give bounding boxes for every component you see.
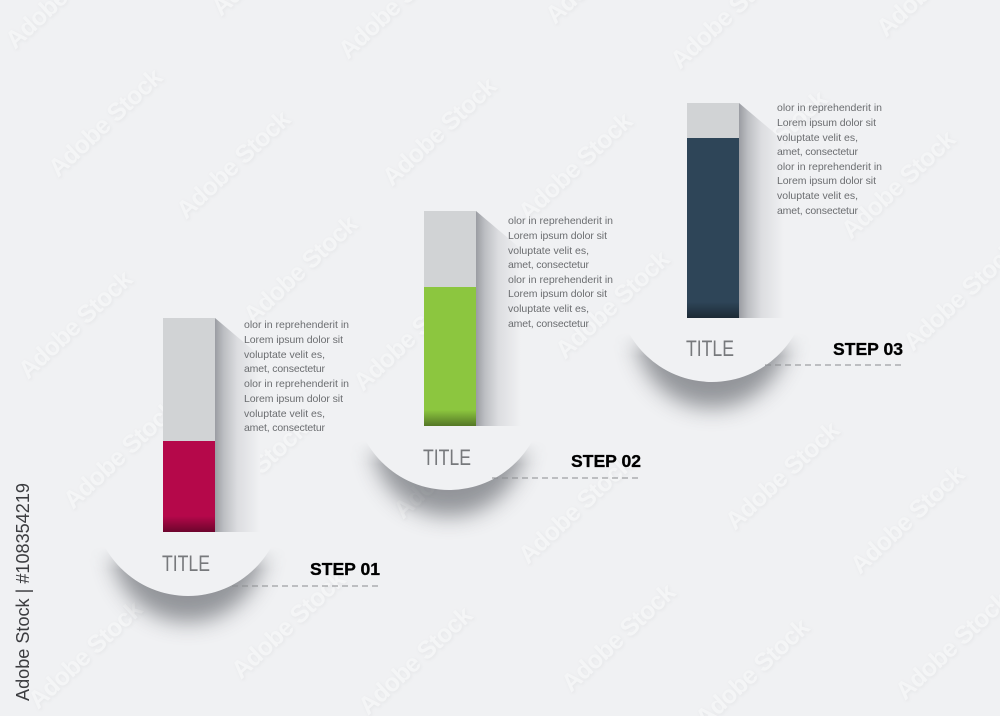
step 03 body text: voluptate velit es, <box>777 132 858 144</box>
step 03 bar shadow <box>739 103 784 318</box>
watermarks: Adobe Stock <box>238 210 363 329</box>
step 02 bar shadow <box>476 211 521 426</box>
watermarks: Adobe Stock <box>845 460 970 579</box>
step 01 body text: voluptate velit es, <box>244 408 325 420</box>
step 03 semicircle <box>632 335 792 382</box>
watermarks: Adobe Stock <box>388 405 513 524</box>
step 01 semicircle <box>108 549 268 596</box>
step 03 body text: olor in reprehenderit in <box>777 161 882 173</box>
step 03 label: STEP 03 <box>833 339 903 359</box>
step 01 body text: Lorem ipsum dolor sit <box>244 334 343 346</box>
watermarks: Adobe Stock <box>23 595 148 714</box>
step 01 body text: voluptate velit es, <box>244 349 325 361</box>
watermarks: Adobe Stock <box>188 415 313 534</box>
watermarks: Adobe Stock <box>58 395 183 514</box>
step 01 label: STEP 01 <box>310 559 380 579</box>
step 01 body text: olor in reprehenderit in <box>244 378 349 390</box>
watermarks: Adobe Stock <box>43 63 168 182</box>
watermarks: Adobe Stock <box>377 72 502 191</box>
step 03 <box>617 102 903 408</box>
watermarks: Adobe Stock <box>720 416 845 535</box>
step 01 body text: olor in reprehenderit in <box>244 319 349 331</box>
step 02 body text: Lorem ipsum dolor sit <box>508 230 607 242</box>
watermarks: Adobe Stock <box>13 265 138 384</box>
step 03 body text: olor in reprehenderit in <box>777 102 882 114</box>
step 02 semicircle shadow <box>362 447 536 530</box>
step 03 body text <box>777 102 882 217</box>
watermarks: Adobe Stock <box>513 450 638 569</box>
step 02 body text <box>508 215 613 330</box>
step 02 body text: Lorem ipsum dolor sit <box>508 288 607 300</box>
step 01 bar bottom shade <box>163 516 215 532</box>
step 02 body text: voluptate velit es, <box>508 245 589 257</box>
step 02 title: TITLE <box>423 445 471 470</box>
step 01 <box>93 318 380 622</box>
watermarks: Adobe Stock <box>171 105 296 224</box>
step 01 semicircle shadow <box>101 553 275 636</box>
step 02 body text: amet, consectetur <box>508 259 590 271</box>
step 02 bar empty part <box>424 211 476 287</box>
step 02 body text: olor in reprehenderit in <box>508 274 613 286</box>
step 03 dashed line <box>765 364 902 366</box>
step 03 body text: voluptate velit es, <box>777 190 858 202</box>
step 01 bar filled part <box>163 441 215 532</box>
watermarks: Adobe Stock <box>513 107 638 226</box>
step 02 <box>354 211 641 516</box>
step 02 semicircle <box>370 442 528 490</box>
step 01 bar shadow <box>215 318 260 532</box>
step 01 bar empty part <box>163 318 215 441</box>
step 02 dashed line <box>492 477 640 479</box>
step 03 semicircle shadow <box>625 339 799 422</box>
watermarks: Adobe Stock <box>556 578 681 697</box>
step 03 title: TITLE <box>686 336 734 361</box>
step 03 bar bottom shade <box>687 302 739 318</box>
step 01 dashed line <box>232 585 378 587</box>
step 02 body text: voluptate velit es, <box>508 303 589 315</box>
step 02 label: STEP 02 <box>571 451 641 471</box>
step 02 body text: amet, consectetur <box>508 318 590 330</box>
step 01 title: TITLE <box>162 551 210 576</box>
watermarks: Adobe Stock <box>550 245 675 364</box>
step 01 body text: Lorem ipsum dolor sit <box>244 393 343 405</box>
step 03 body text: amet, consectetur <box>777 146 858 158</box>
watermarks: Adobe Stock <box>708 85 833 204</box>
step 03 body text: Lorem ipsum dolor sit <box>777 175 876 187</box>
step 03 bar filled part <box>687 138 739 318</box>
step 03 body text: Lorem ipsum dolor sit <box>777 117 876 129</box>
step 02 bar filled part <box>424 287 476 426</box>
step 03 bar empty part <box>687 103 739 138</box>
step 03 body text: amet, consectetur <box>777 205 858 217</box>
step 02 body text: olor in reprehenderit in <box>508 215 613 227</box>
step 02 bar bottom shade <box>424 410 476 426</box>
watermarks: Adobe Stock <box>348 277 473 396</box>
watermarks: Adobe Stock <box>836 125 961 244</box>
step 01 body text: amet, consectetur <box>244 363 326 375</box>
watermarks: Adobe Stock <box>226 565 351 684</box>
step 01 body text <box>244 319 349 434</box>
step 01 body text: amet, consectetur <box>244 422 326 434</box>
stock id vertical text: Adobe Stock | #108354219 <box>13 483 33 701</box>
